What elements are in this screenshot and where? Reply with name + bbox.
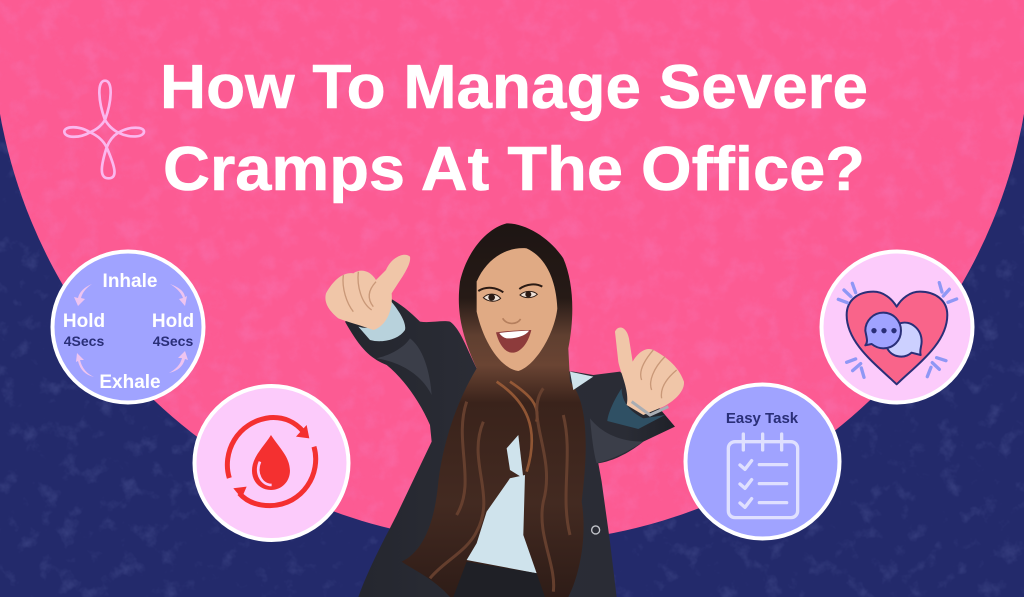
breathing labels: 4Secs bbox=[64, 333, 104, 349]
breathing labels: Inhale bbox=[103, 271, 157, 292]
eyes bbox=[483, 291, 537, 301]
shirt bbox=[467, 372, 593, 573]
breathing labels: Exhale bbox=[99, 372, 161, 393]
left cuff bbox=[358, 300, 405, 341]
sleeve highlights bbox=[377, 338, 643, 463]
hair highlights bbox=[430, 382, 570, 592]
title bbox=[160, 53, 868, 204]
breathing arrows bbox=[74, 284, 188, 377]
title: Cramps At The Office? bbox=[163, 135, 865, 204]
skirt bbox=[453, 562, 545, 597]
panel: heart chat bbox=[822, 252, 972, 402]
icon: checklist calendar bbox=[728, 434, 798, 518]
panel: easy task bbox=[686, 384, 840, 538]
woman giving thumbs up bbox=[325, 223, 684, 597]
breathing labels: 4Secs bbox=[153, 333, 193, 349]
icon: blood drop with arrows bbox=[227, 418, 316, 506]
eyebrows bbox=[478, 284, 542, 292]
title: How To Manage Severe bbox=[160, 53, 868, 122]
easy task label: Easy Task bbox=[726, 410, 799, 427]
jacket button bbox=[592, 526, 600, 534]
icon: heart with chat bubbles bbox=[838, 283, 957, 384]
hair bbox=[402, 223, 586, 597]
breathing labels: Hold bbox=[152, 311, 194, 332]
panel: blood cycle bbox=[194, 386, 348, 540]
right cuff bbox=[607, 388, 665, 429]
nose bbox=[503, 318, 521, 323]
breathing labels bbox=[63, 271, 194, 393]
panel: breathing cycle bbox=[52, 252, 204, 402]
mouth bbox=[496, 330, 531, 353]
left hand bbox=[325, 255, 410, 330]
breathing labels: Hold bbox=[63, 311, 105, 332]
icon: decorative flower knot bbox=[64, 81, 144, 178]
right hand bbox=[615, 327, 684, 415]
jacket bbox=[345, 298, 675, 597]
face bbox=[477, 248, 557, 371]
watch bbox=[632, 402, 668, 415]
